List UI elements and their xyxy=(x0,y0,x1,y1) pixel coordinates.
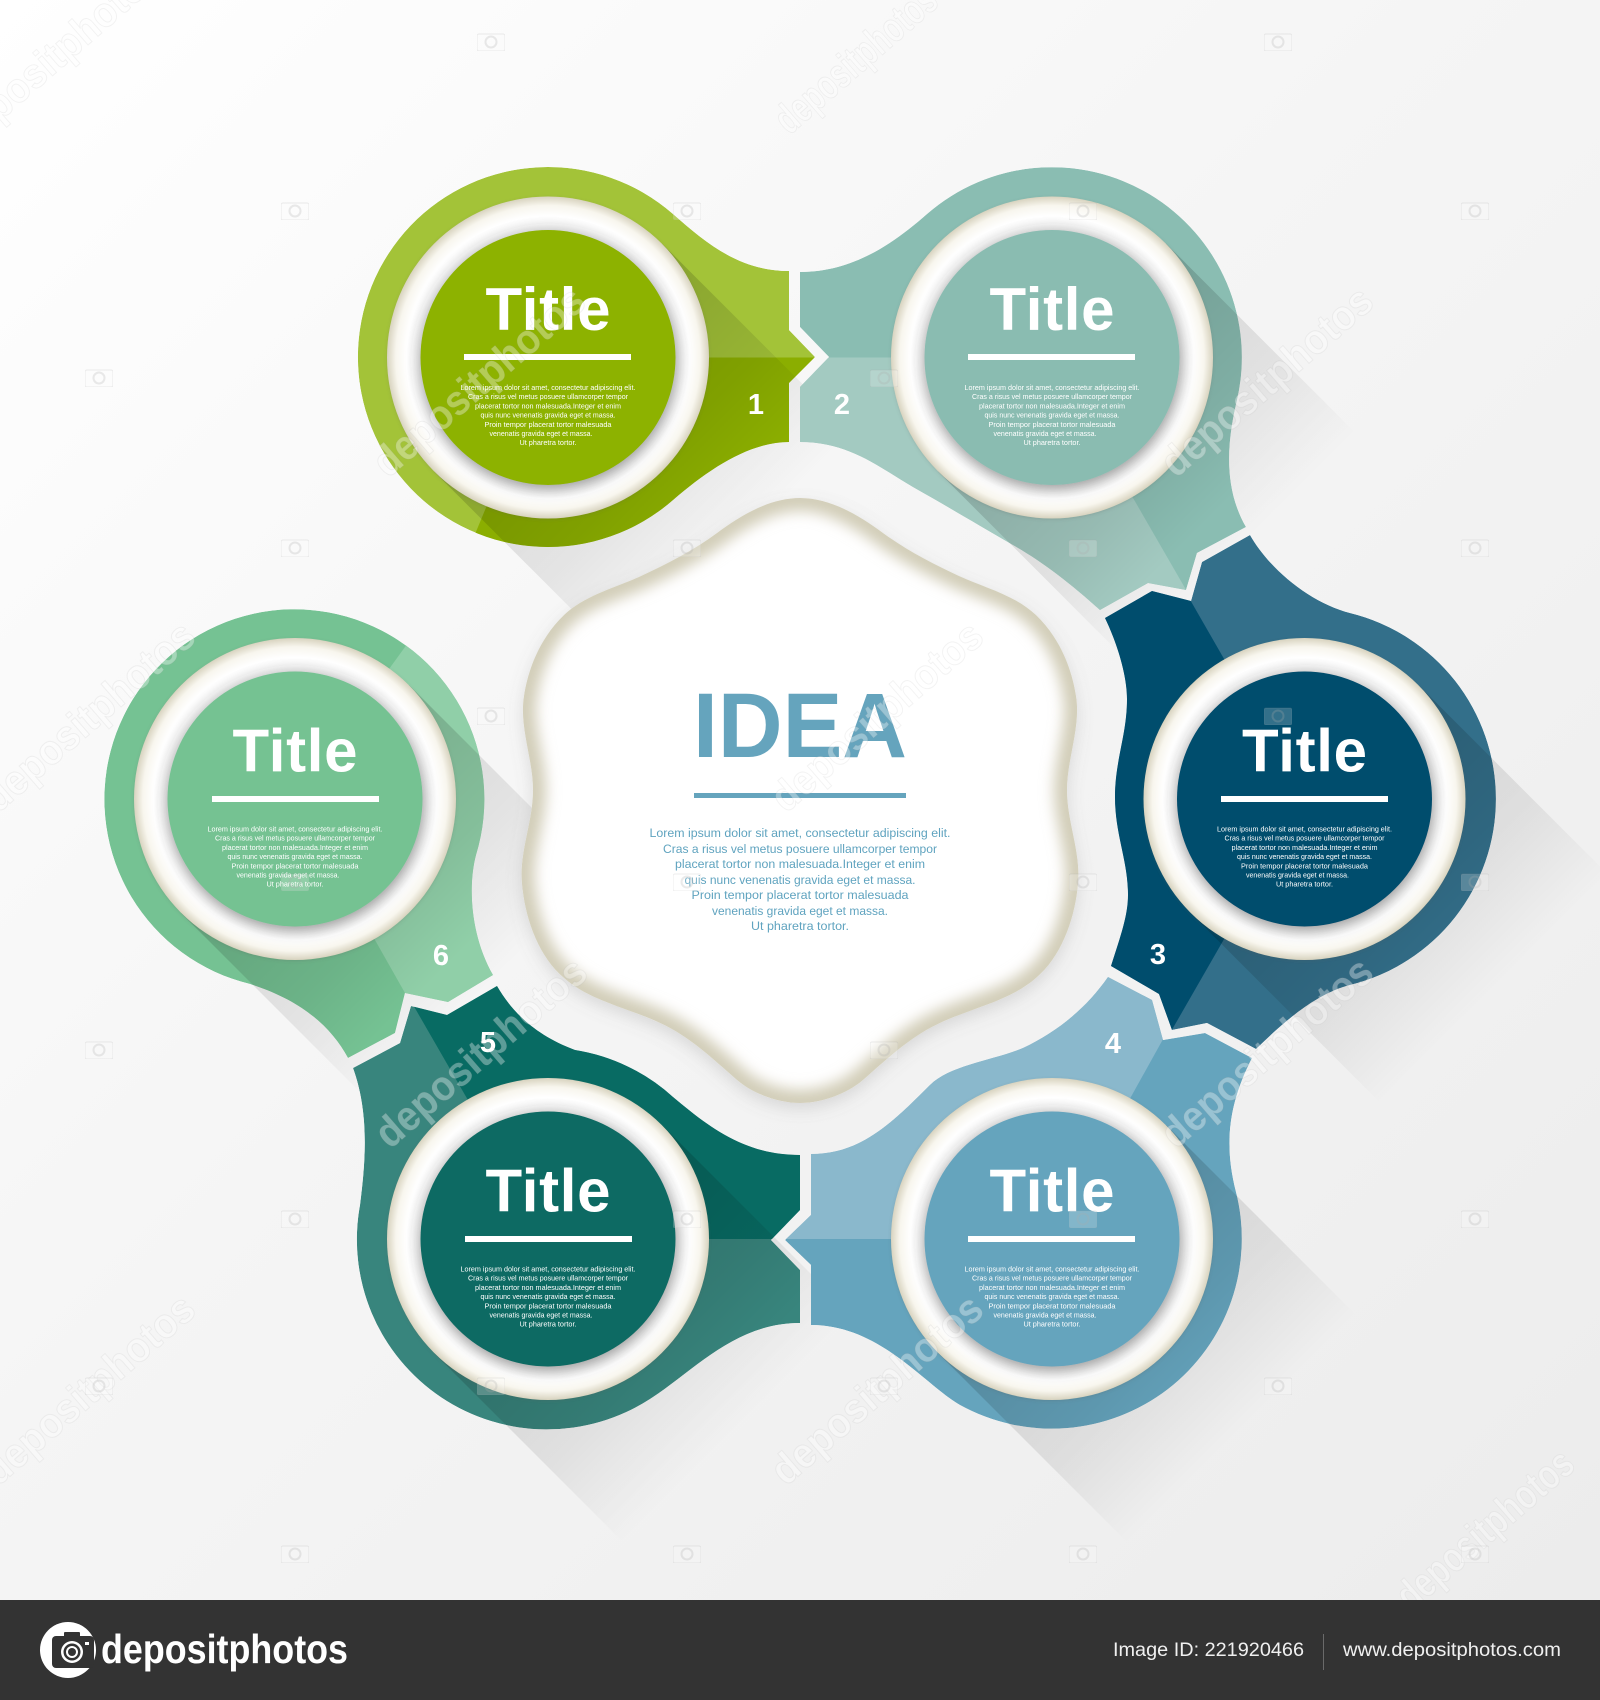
step 1 number: 1 xyxy=(748,389,764,421)
step 4 title: Title xyxy=(990,1158,1114,1224)
icon: camera logo xyxy=(40,1622,96,1678)
step 6 number: 6 xyxy=(433,940,449,972)
centre flower shape xyxy=(522,498,1078,1103)
step 6 body text: Cras a risus vel metus posuere ullamcorper tempor xyxy=(215,834,376,843)
centre body text: Ut pharetra tortor. xyxy=(751,919,849,933)
step 6 body text: placerat tortor non malesuada.Integer et enim xyxy=(222,843,368,852)
panel: step 4 xyxy=(785,977,1252,1429)
step 4 band xyxy=(785,977,1252,1429)
step 4 body text: Lorem ipsum dolor sit amet, consectetur adipiscing elit. xyxy=(964,1264,1140,1274)
image id: Image ID: 221920466 xyxy=(1113,1639,1304,1661)
step 2 body text: venenatis gravida eget et massa. xyxy=(994,429,1096,438)
step 6 disc xyxy=(168,672,422,926)
step 2 body text: placerat tortor non malesuada.Integer et enim xyxy=(979,401,1125,410)
watermark text: depositphotos xyxy=(761,1284,992,1494)
step 6 body text: quis nunc venenatis gravida eget et massa. xyxy=(228,852,362,861)
watermark text: depositphotos xyxy=(1151,276,1382,486)
step 3 number: 3 xyxy=(1150,939,1166,971)
panel: step 6 xyxy=(104,609,493,1058)
step 5 body text: Proin tempor placerat tortor malesuada xyxy=(484,1301,612,1310)
step 5 title: Title xyxy=(486,1158,610,1224)
step 2 body text: Proin tempor placerat tortor malesuada xyxy=(988,420,1116,429)
step 3 body text: Proin tempor placerat tortor malesuada xyxy=(1241,861,1369,870)
step 1 body text: Ut pharetra tortor. xyxy=(520,438,576,447)
panel: step 1 xyxy=(358,167,815,547)
step 2 body text: Lorem ipsum dolor sit amet, consectetur adipiscing elit. xyxy=(964,383,1140,392)
step 2 body text: Ut pharetra tortor. xyxy=(1024,438,1080,447)
watermark text: depositphotos xyxy=(365,947,596,1157)
step 2 body text: Cras a risus vel metus posuere ullamcorper tempor xyxy=(972,392,1133,401)
step 3 disc xyxy=(1177,672,1432,926)
step 3 body text xyxy=(1217,824,1392,889)
centre body text: venenatis gravida eget et massa. xyxy=(712,904,888,918)
step 2 disc xyxy=(924,230,1180,485)
step 6 ring xyxy=(134,638,456,960)
step 3 body text: quis nunc venenatis gravida eget et massa. xyxy=(1237,852,1372,861)
step 5 body text: placerat tortor non malesuada.Integer et enim xyxy=(475,1283,621,1292)
step 2 title: Title xyxy=(990,276,1114,343)
panel: step 5 xyxy=(353,986,800,1430)
watermark text: depositphotos xyxy=(363,276,594,486)
step 6 body text: venenatis gravida eget et massa. xyxy=(236,870,340,880)
step 4 body text: Proin tempor placerat tortor malesuada xyxy=(988,1301,1116,1310)
step 1 band xyxy=(358,167,815,547)
step 1 underline xyxy=(464,354,631,360)
step 3 body text: venenatis gravida eget et massa. xyxy=(1246,870,1349,880)
step 5 band xyxy=(353,986,800,1430)
step 6 underline xyxy=(212,796,379,802)
watermark text: depositphotos xyxy=(1151,947,1382,1157)
step 6 body text xyxy=(208,824,382,889)
step 1 body text: Cras a risus vel metus posuere ullamcorper tempor xyxy=(468,392,629,401)
panel: step 2 xyxy=(800,167,1246,610)
watermark text: depositphotos xyxy=(761,611,992,821)
step 3 underline xyxy=(1221,796,1388,802)
watermark camera icons xyxy=(85,34,1489,1563)
step 4 underline xyxy=(968,1236,1135,1242)
step 4 number: 4 xyxy=(1105,1028,1121,1060)
step 1 body text: Proin tempor placerat tortor malesuada xyxy=(484,420,612,429)
step 3 body text: Ut pharetra tortor. xyxy=(1276,880,1333,889)
footer bar xyxy=(0,1600,1600,1700)
step 5 disc xyxy=(420,1112,676,1366)
centre body text: quis nunc venenatis gravida eget et massa. xyxy=(684,873,916,887)
step 5 underline xyxy=(465,1236,632,1242)
step 5 body text: Cras a risus vel metus posuere ullamcorper tempor xyxy=(468,1274,629,1283)
step 1 body text xyxy=(460,383,636,447)
step 1 body text: venenatis gravida eget et massa. xyxy=(490,429,592,438)
step 3 title: Title xyxy=(1242,718,1367,784)
step 2 number: 2 xyxy=(834,389,850,421)
logo wordmark: depositphotos xyxy=(101,1626,348,1672)
footer divider xyxy=(1323,1634,1324,1670)
step 2 ring xyxy=(891,196,1213,518)
centre body text: Proin tempor placerat tortor malesuada xyxy=(692,888,909,902)
step 1 disc xyxy=(420,230,676,485)
step 4 body text: Ut pharetra tortor. xyxy=(1024,1320,1080,1329)
step 2 underline xyxy=(968,354,1135,360)
step 1 body text: placerat tortor non malesuada.Integer et enim xyxy=(475,401,621,410)
step 3 ring xyxy=(1144,638,1466,960)
step 1 body text: Lorem ipsum dolor sit amet, consectetur adipiscing elit. xyxy=(460,383,636,392)
long shadows on background xyxy=(181,244,1600,1543)
step 6 title: Title xyxy=(232,718,358,784)
step 5 body text: quis nunc venenatis gravida eget et massa. xyxy=(480,1292,616,1301)
step 3 body text: placerat tortor non malesuada.Integer et enim xyxy=(1232,843,1378,852)
step 4 body text: quis nunc venenatis gravida eget et massa. xyxy=(984,1292,1120,1301)
step 6 body text: Proin tempor placerat tortor malesuada xyxy=(232,861,359,870)
step 5 ring xyxy=(387,1078,709,1400)
centre body text xyxy=(650,826,950,933)
centre underline xyxy=(694,793,906,798)
step 5 body text: Lorem ipsum dolor sit amet, consectetur adipiscing elit. xyxy=(460,1264,636,1274)
step 2 body text: quis nunc venenatis gravida eget et massa. xyxy=(984,411,1120,420)
step 6 body text: Lorem ipsum dolor sit amet, consectetur adipiscing elit. xyxy=(208,824,382,834)
step 2 body text xyxy=(964,383,1140,447)
step 5 body text xyxy=(460,1264,636,1329)
step 4 body text xyxy=(964,1264,1140,1329)
step 1 ring xyxy=(387,196,709,518)
step 4 body text: Cras a risus vel metus posuere ullamcorper tempor xyxy=(972,1274,1133,1283)
step 3 band xyxy=(1105,535,1496,1049)
centre body text: Lorem ipsum dolor sit amet, consectetur adipiscing elit. xyxy=(650,826,950,840)
panel: step 3 xyxy=(1105,535,1496,1049)
step 4 body text: placerat tortor non malesuada.Integer et enim xyxy=(979,1283,1125,1292)
step 5 number: 5 xyxy=(480,1027,496,1059)
step 5 body text: Ut pharetra tortor. xyxy=(520,1320,576,1329)
step 5 body text: venenatis gravida eget et massa. xyxy=(490,1310,592,1320)
centre body text: Cras a risus vel metus posuere ullamcorper tempor xyxy=(663,842,937,856)
step 4 ring xyxy=(891,1078,1213,1400)
step 2 band xyxy=(800,167,1246,610)
step 6 body text: Ut pharetra tortor. xyxy=(266,880,324,889)
centre body text: placerat tortor non malesuada.Integer et enim xyxy=(675,857,925,871)
panel: centre idea xyxy=(522,498,1078,1103)
website address: www.depositphotos.com xyxy=(1342,1639,1561,1661)
step 4 body text: venenatis gravida eget et massa. xyxy=(994,1310,1096,1320)
step 3 body text: Cras a risus vel metus posuere ullamcorper tempor xyxy=(1224,834,1385,843)
step 1 body text: quis nunc venenatis gravida eget et massa. xyxy=(480,411,616,420)
step 4 disc xyxy=(924,1112,1180,1366)
step 3 body text: Lorem ipsum dolor sit amet, consectetur adipiscing elit. xyxy=(1217,824,1392,834)
step 6 band xyxy=(104,609,493,1058)
step 1 title: Title xyxy=(486,276,610,343)
centre heading: IDEA xyxy=(693,675,907,777)
